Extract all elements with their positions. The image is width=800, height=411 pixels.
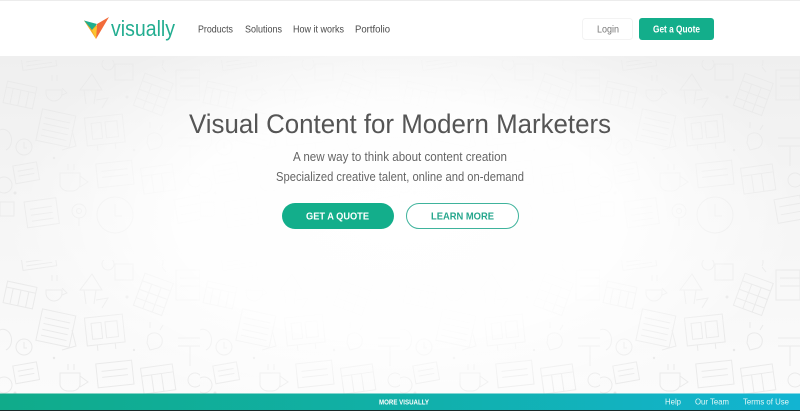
get a quote button: Get a Quote bbox=[653, 24, 700, 36]
hero subheading bbox=[276, 150, 524, 184]
navigation links: How it works bbox=[293, 24, 344, 36]
hero subheading: A new way to think about content creation bbox=[293, 150, 507, 164]
footer links: Help bbox=[665, 396, 681, 406]
footer links: Terms of Use bbox=[743, 396, 789, 406]
hero subheading: Specialized creative talent, online and on-demand bbox=[276, 170, 524, 184]
footer links: Our Team bbox=[695, 396, 729, 406]
header bar bbox=[0, 0, 800, 56]
hero button: learn more: LEARN MORE bbox=[431, 210, 494, 222]
icon: visually logo mark bbox=[84, 17, 109, 39]
hero button: learn more bbox=[406, 204, 518, 228]
login button: Login bbox=[597, 24, 619, 36]
logo wordmark: visually bbox=[111, 16, 175, 41]
footer label: MORE VISUALLY bbox=[379, 400, 429, 406]
get a quote button bbox=[639, 18, 714, 40]
footer bar bbox=[0, 394, 800, 411]
footer links bbox=[665, 396, 789, 406]
hero button: get a quote: GET A QUOTE bbox=[306, 210, 369, 222]
navigation links: Portfolio bbox=[355, 24, 390, 36]
hero button: get a quote bbox=[282, 203, 394, 229]
navigation links: Products bbox=[198, 24, 233, 36]
hero heading: Visual Content for Modern Marketers bbox=[189, 109, 611, 139]
navigation links bbox=[198, 24, 390, 36]
login button bbox=[582, 18, 632, 40]
navigation links: Solutions bbox=[245, 24, 282, 36]
